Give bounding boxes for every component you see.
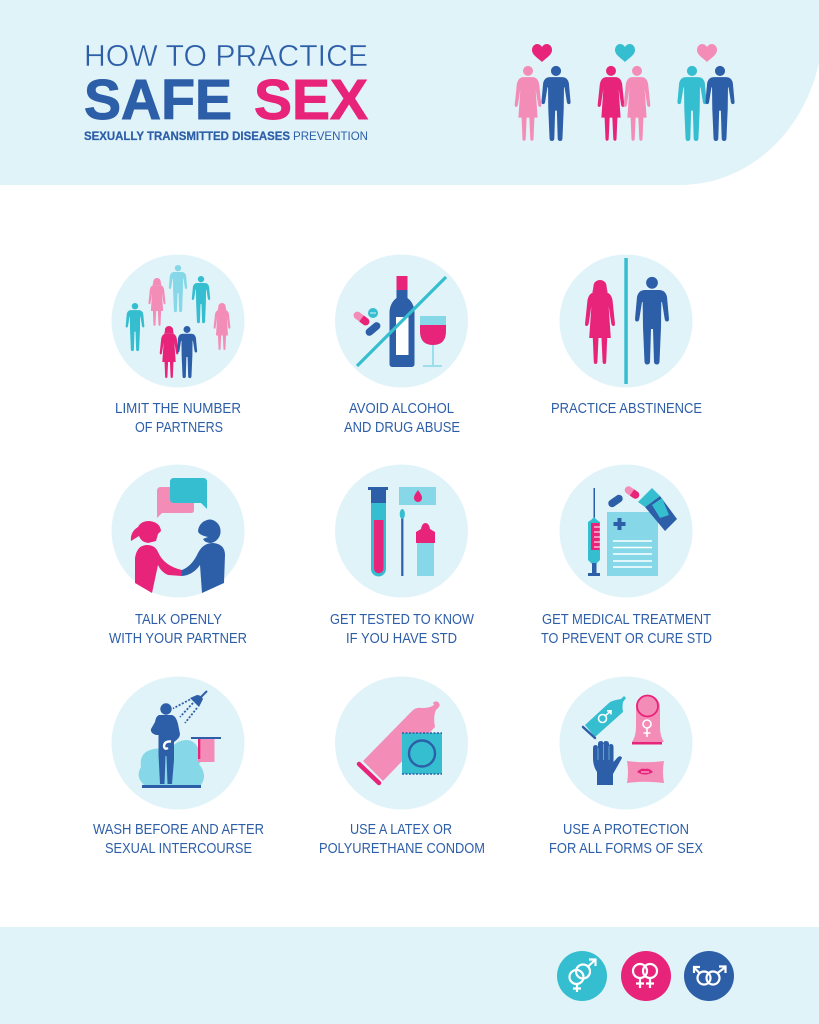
label: PRACTICE ABSTINENCE — [551, 401, 702, 417]
icon: condom — [359, 701, 440, 783]
icon: dental dam — [627, 761, 664, 783]
icon: female-female symbol — [621, 951, 671, 1001]
icon: pills — [352, 308, 382, 337]
label — [549, 822, 703, 857]
panel: talk openly — [109, 464, 247, 647]
panel: avoid alcohol — [335, 254, 468, 436]
icon: man shaking hands — [182, 519, 225, 593]
label: LIMIT THE NUMBER — [115, 401, 241, 417]
icon: glove — [593, 741, 622, 785]
label — [109, 612, 247, 647]
label: GET MEDICAL TREATMENT — [542, 612, 711, 628]
icon: swab — [400, 509, 405, 576]
panel: medical treatment — [541, 464, 712, 647]
footer band — [0, 927, 819, 1024]
subtitle: SEXUALLY TRANSMITTED DISEASES — [84, 129, 290, 143]
icon: male-male symbol — [684, 951, 734, 1001]
panel: get tested — [330, 464, 474, 647]
label: AVOID ALCOHOL — [349, 401, 454, 417]
icon: male-female symbol — [557, 951, 607, 1001]
label — [330, 612, 474, 647]
label: SEXUAL INTERCOURSE — [105, 841, 252, 857]
label: USE A LATEX OR — [350, 822, 452, 838]
slash line — [357, 277, 446, 366]
label: POLYURETHANE CONDOM — [319, 841, 485, 857]
subtitle: PREVENTION — [293, 129, 368, 143]
icon: shower head — [173, 691, 207, 723]
label: AND DRUG ABUSE — [344, 420, 460, 436]
label: OF PARTNERS — [135, 420, 223, 436]
label: GET TESTED TO KNOW — [330, 612, 474, 628]
title: SEX — [254, 68, 368, 132]
icon: sample bottle — [416, 523, 435, 576]
title — [84, 39, 368, 132]
title: HOW TO PRACTICE — [84, 39, 368, 73]
label — [541, 612, 712, 647]
label: FOR ALL FORMS OF SEX — [549, 841, 703, 857]
icon: towel — [191, 737, 221, 762]
header band — [0, 0, 819, 185]
icon: wine bottle — [390, 276, 414, 367]
panel: limit partners — [112, 254, 244, 436]
label — [344, 401, 460, 436]
icon: medical document — [607, 512, 658, 576]
icon: woman shaking hands — [131, 521, 182, 593]
icon: man showering — [151, 703, 180, 784]
label: WITH YOUR PARTNER — [109, 631, 247, 647]
icon: wine glass — [420, 316, 446, 366]
icon: condom packet — [402, 733, 442, 774]
icon: male condom — [583, 696, 626, 738]
icon: three couples with hearts — [515, 44, 735, 141]
panel: condom — [319, 676, 485, 857]
label: TO PREVENT OR CURE STD — [541, 631, 712, 647]
label: TALK OPENLY — [135, 612, 222, 628]
label — [93, 822, 264, 857]
icon: group of people — [126, 265, 230, 378]
label: USE A PROTECTION — [563, 822, 689, 838]
panel: wash — [93, 676, 264, 857]
icon: blood sample card — [399, 487, 436, 505]
label — [115, 401, 241, 436]
icon: pills and bottle — [607, 485, 677, 531]
label — [319, 822, 485, 857]
title: SAFE — [84, 68, 232, 132]
icon: woman and man separated — [585, 258, 669, 384]
icon: test tube — [368, 487, 388, 576]
icon: syringe — [588, 488, 600, 576]
label: WASH BEFORE AND AFTER — [93, 822, 264, 838]
icon: washcloth — [164, 741, 171, 749]
panel: protection — [549, 676, 703, 857]
icon: female condom — [632, 695, 664, 744]
panel: abstinence — [551, 254, 702, 417]
label: IF YOU HAVE STD — [346, 631, 457, 647]
icon: foam cloud — [139, 740, 204, 785]
icon: speech bubbles — [157, 478, 207, 518]
ground line — [142, 785, 201, 788]
